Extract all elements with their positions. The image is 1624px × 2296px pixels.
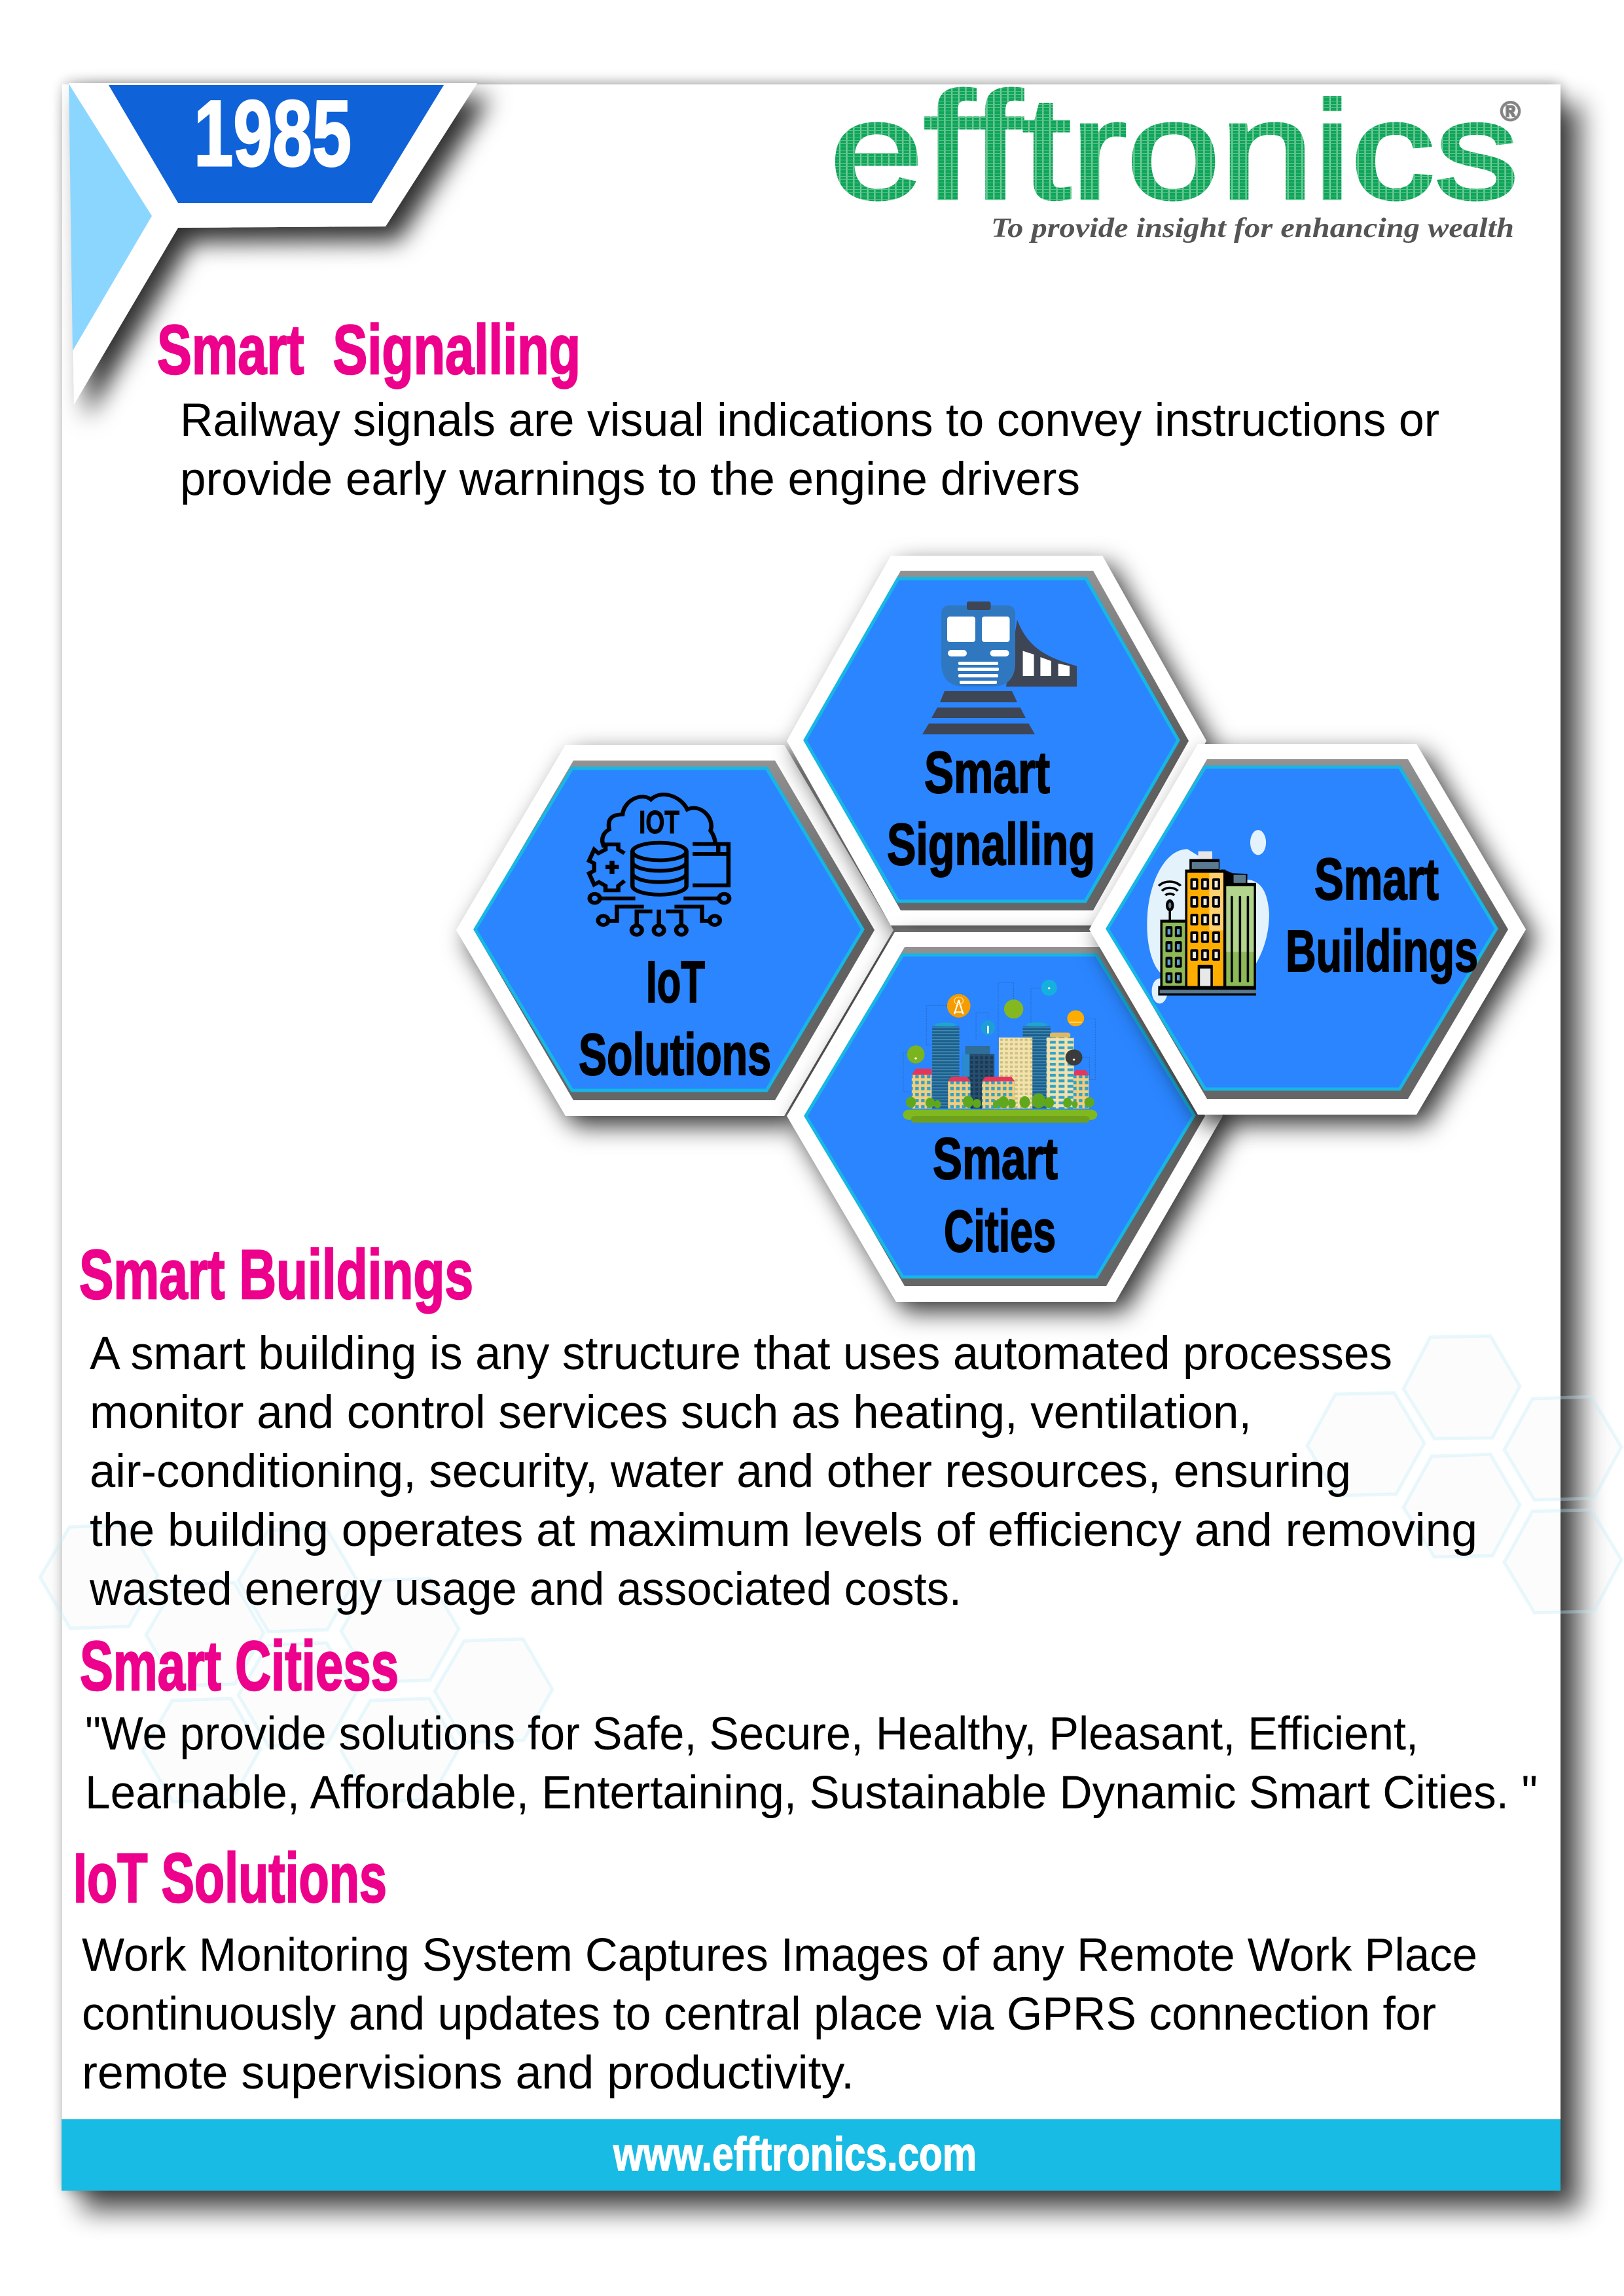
hexagon: Smart Cities: Smart (933, 1126, 1058, 1192)
text: buildings description: A smart building is any structure that uses automated processes (90, 1328, 1392, 1380)
hexagon: Smart Signalling: Smart (924, 740, 1050, 806)
icon: smart buildings (1147, 830, 1269, 1003)
background hexagons: right group (1307, 1336, 1621, 1613)
hexagon: Smart Signalling: Signalling (887, 812, 1095, 878)
text: cities quote (85, 1708, 1538, 1819)
text: IoT description: remote supervisions and productivity. (82, 2047, 854, 2099)
hexagon: Smart Cities (787, 932, 1223, 1302)
hexagon: Smart Buildings: Smart (1314, 847, 1439, 912)
background hexagons: left group (40, 1525, 552, 1802)
hexagon: Smart Buildings (1089, 744, 1526, 1115)
logo: To provide insight for enhancing wealth (991, 213, 1514, 243)
text: buildings description: monitor and control services such as heating, ventilation, (90, 1387, 1252, 1439)
icon: train on track (922, 601, 1077, 734)
text: IoT description (82, 1929, 1477, 2099)
text: signalling description (180, 395, 1439, 505)
text: cities quote: "We provide solutions for Safe, Secure, Healthy, Pleasant, Efficient, (85, 1708, 1418, 1760)
footer bar (62, 2119, 1561, 2191)
hexagon: IoT Solutions (456, 745, 893, 1116)
hexagon: Smart Signalling (787, 556, 1206, 925)
heading: IoT Solutions: IoT Solutions (73, 1839, 387, 1917)
text: buildings description (89, 1328, 1477, 1615)
hexagon: Smart Buildings: Buildings (1286, 919, 1478, 984)
hexagon: IoT Solutions: IoT (646, 950, 705, 1015)
heading: Smart Buildings: Smart Buildings (79, 1235, 473, 1314)
year ribbon: 1985 (194, 82, 352, 186)
text: IoT description: Work Monitoring System Captures Images of any Remote Work Place (82, 1929, 1477, 1981)
icon: smart city skyline (903, 980, 1097, 1122)
text: IoT description: continuously and updates to central place via GPRS connection for (82, 1988, 1436, 2040)
footer bar: www.efftronics.com (613, 2128, 977, 2181)
icon: IoT cloud and database (589, 795, 729, 935)
hexagon: IoT Solutions: Solutions (579, 1022, 771, 1088)
hexagon: Smart Cities: Cities (944, 1199, 1056, 1265)
heading: Smart Citiess: Smart Citiess (80, 1626, 399, 1705)
text: buildings description: wasted energy usage and associated costs. (89, 1564, 962, 1615)
heading: Smart Signalling: Smart Signalling (157, 310, 581, 389)
text: buildings description: the building operates at maximum levels of efficiency and removing (90, 1505, 1477, 1556)
text: signalling description: provide early warnings to the engine drivers (180, 454, 1080, 505)
year ribbon (69, 82, 477, 404)
hexagon: IoT Solutions: IOT (639, 805, 679, 840)
logo: efftronics (830, 62, 1519, 231)
logo: ® (1500, 96, 1521, 126)
text: buildings description: air-conditioning, security, water and other resources, ensuring (90, 1446, 1351, 1498)
text: signalling description: Railway signals are visual indications to convey instructions or (180, 395, 1439, 446)
text: cities quote: Learnable, Affordable, Entertaining, Sustainable Dynamic Smart Cities. " (85, 1767, 1538, 1819)
